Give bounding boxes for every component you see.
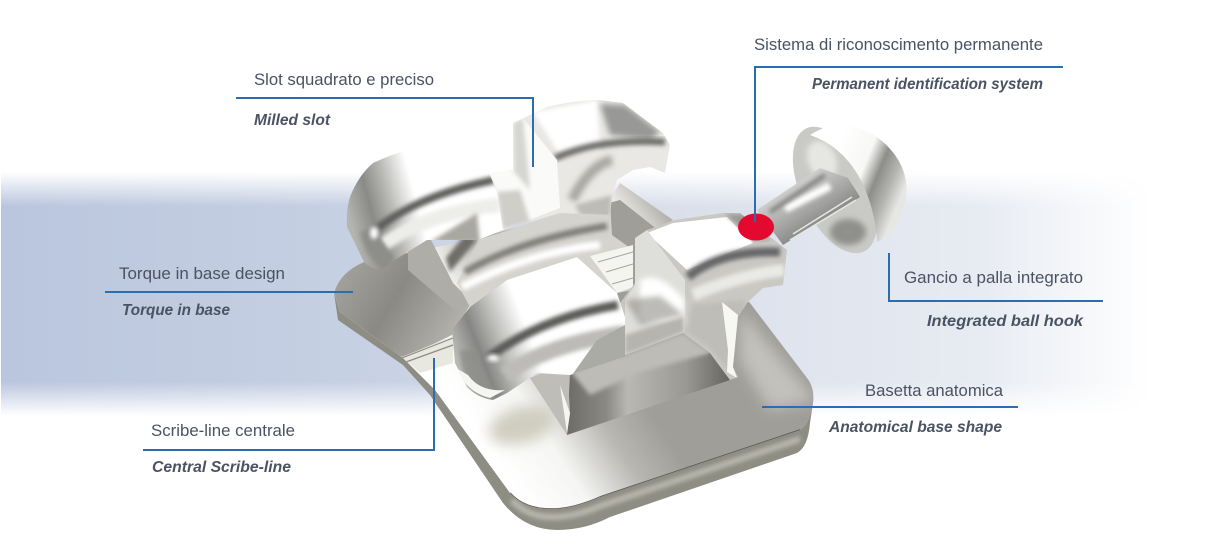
label: permanent identification system bbox=[754, 36, 1063, 222]
ball hook dome bbox=[810, 125, 907, 242]
label: anatomical base shape: Basetta anatomica bbox=[865, 382, 1004, 400]
label: permanent identification system: Sistema di riconoscimento permanente bbox=[754, 36, 1043, 54]
label: anatomical base shape bbox=[762, 382, 1018, 436]
label: anatomical base shape: Anatomical base shape bbox=[828, 419, 1002, 436]
base plate edge bbox=[334, 293, 813, 530]
shaft shading bbox=[465, 226, 607, 272]
back plate bbox=[610, 183, 673, 260]
label: integrated ball hook: Gancio a palla integrato bbox=[904, 269, 1083, 287]
bracket illustration bbox=[320, 95, 907, 540]
front-right tie wing bbox=[620, 213, 787, 380]
label: central scribe-line: Central Scribe-line bbox=[152, 459, 291, 476]
base plate face bbox=[334, 200, 814, 509]
background band bbox=[1, 172, 1151, 416]
front-left tie wing bbox=[452, 257, 625, 400]
red identification dot bbox=[738, 214, 774, 240]
label: milled slot: Milled slot bbox=[254, 112, 331, 129]
disc inner shading bbox=[801, 136, 843, 184]
base plate edge highlight bbox=[512, 439, 800, 517]
shaft between tie wings bbox=[457, 200, 633, 307]
label: torque in base: Torque in base bbox=[122, 302, 230, 319]
label: torque in base bbox=[105, 265, 353, 319]
front centre block bbox=[567, 353, 730, 435]
label: central scribe-line: Scribe-line centrale bbox=[151, 422, 295, 440]
back strut bbox=[408, 238, 472, 312]
back-left tie wing bbox=[346, 152, 503, 269]
label: integrated ball hook bbox=[889, 253, 1103, 330]
label: milled slot bbox=[236, 71, 533, 167]
ball hook disc bbox=[775, 114, 895, 266]
label: permanent identification system: Permanent identification system bbox=[812, 76, 1043, 93]
back-right tie wing bbox=[492, 100, 670, 230]
block top shading bbox=[571, 333, 710, 395]
slot strip bbox=[590, 245, 633, 293]
ball hook stem bbox=[757, 168, 860, 245]
label: torque in base: Torque in base design bbox=[119, 265, 285, 283]
block left pillar bbox=[530, 372, 570, 435]
label: milled slot: Slot squadrato e preciso bbox=[254, 71, 434, 89]
label: integrated ball hook: Integrated ball hook bbox=[927, 313, 1084, 330]
label: central scribe-line bbox=[143, 358, 434, 476]
